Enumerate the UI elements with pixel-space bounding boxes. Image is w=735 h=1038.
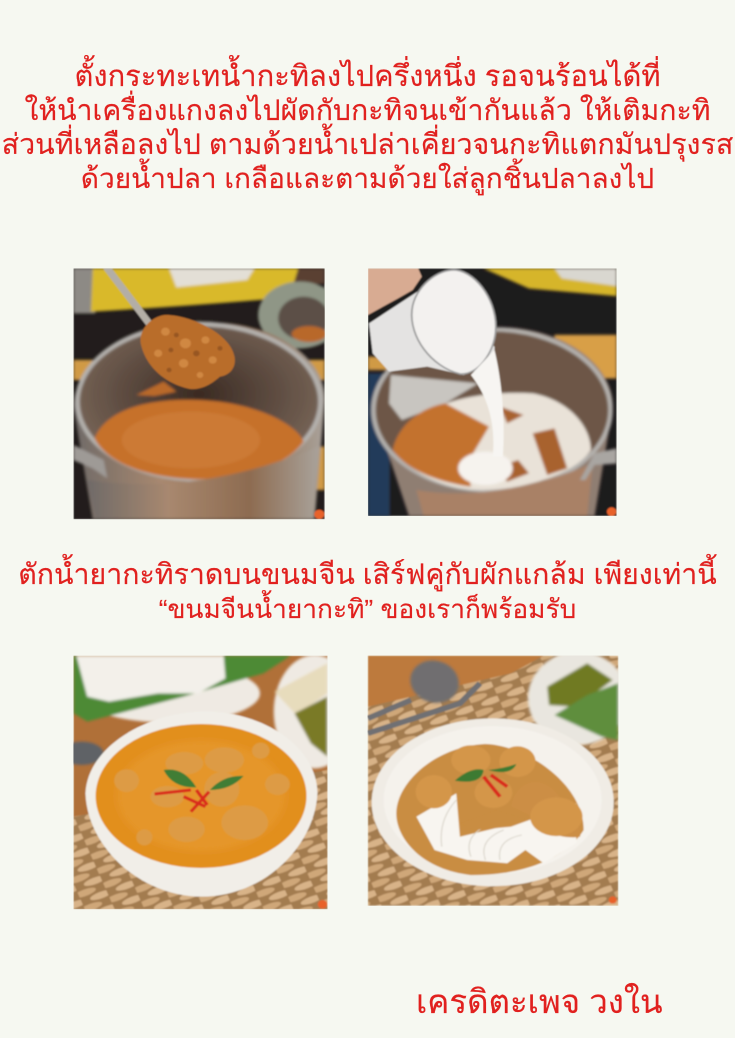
serving instructions text: “ขนมจีนน้ำยากะทิ” ของเราก็พร้อมรับ: [159, 594, 576, 624]
photo grid: [73, 268, 618, 910]
credit text: เครดิตะเพจ วงใน: [416, 983, 663, 1020]
photo: noodles on plate with curry: [368, 652, 628, 906]
photo: coconut milk poured into pot: [368, 268, 617, 516]
intro instructions text: [2, 55, 733, 196]
photo: curry bowl with fish balls: [73, 656, 328, 910]
serving instructions text: [18, 554, 717, 624]
photo: curry paste in ladle over pot: [73, 268, 342, 519]
serving instructions text: ตักน้ำยากะทิราดบนขนมจีน เสิร์ฟคู่กับผักแกล้ม เพียงเท่านี้: [18, 559, 717, 591]
intro instructions text: ให้นำเครื่องแกงลงไปผัดกับกะทิจนเข้ากันแล้ว ให้เติมกะทิ: [24, 95, 711, 127]
intro instructions text: ด้วยน้ำปลา เกลือและตามด้วยใส่ลูกชิ้นปลาลงไป: [81, 163, 654, 194]
intro instructions text: ตั้งกระทะเทน้ำกะทิลงไปครึ่งหนึ่ง รอจนร้อนได้ที่: [74, 61, 661, 93]
intro instructions text: ส่วนที่เหลือลงไป ตามด้วยน้ำเปล่าเคี่ยวจนกะทิแตกมันปรุงรส: [2, 129, 733, 161]
